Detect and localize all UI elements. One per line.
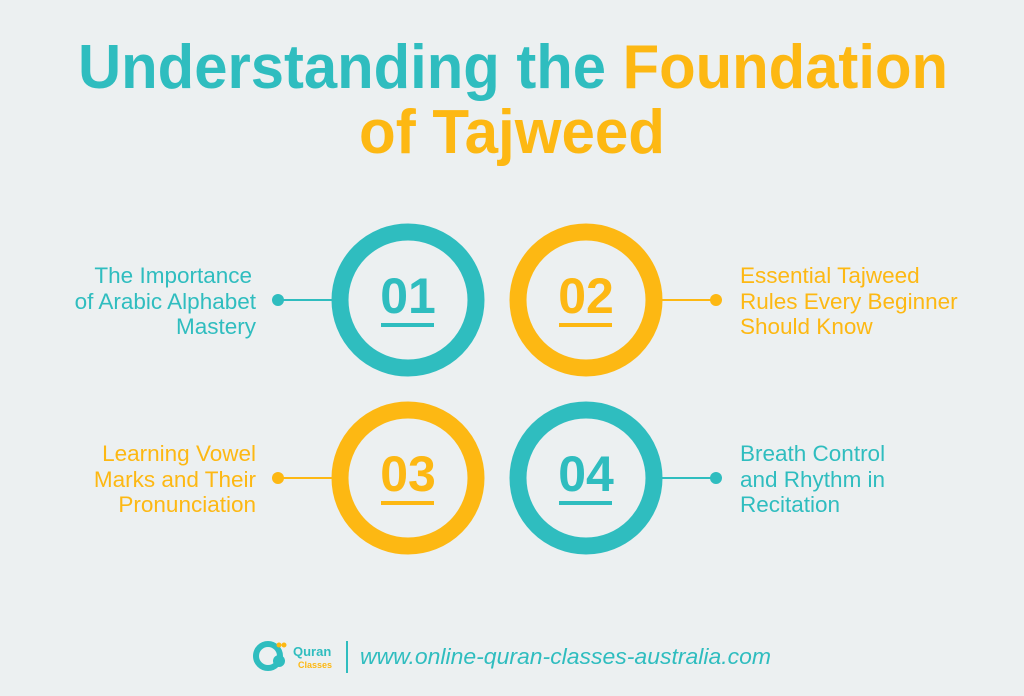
footer logo: Quran [293, 644, 331, 659]
title [78, 33, 948, 167]
item 04: Recitation [740, 492, 840, 517]
item 02: Rules Every Beginner [740, 289, 958, 314]
item 02 [518, 232, 958, 368]
item 03 [94, 410, 476, 546]
footer logo: Classes [298, 660, 332, 670]
item 01: 01 [380, 268, 436, 324]
item 04: Breath Control [740, 441, 885, 466]
item 03: Pronunciation [118, 492, 256, 517]
item 02: Should Know [740, 314, 873, 339]
title: of Tajweed [359, 98, 665, 167]
item 02: 02 [558, 268, 614, 324]
item 03: Marks and Their [94, 467, 256, 492]
item 02: Essential Tajweed [740, 263, 920, 288]
item 04: 04 [558, 446, 614, 502]
footer url: www.online-quran-classes-australia.com [360, 644, 771, 669]
footer logo [256, 641, 348, 673]
item 01 [75, 232, 476, 368]
item 01: The Importance [94, 263, 252, 288]
item 04 [518, 410, 885, 546]
item 01: Mastery [176, 314, 257, 339]
title: Understanding the Foundation [78, 33, 948, 102]
item 03: Learning Vowel [102, 441, 256, 466]
item 04: and Rhythm in [740, 467, 885, 492]
item 01: of Arabic Alphabet [75, 289, 257, 314]
item 03: 03 [380, 446, 436, 502]
